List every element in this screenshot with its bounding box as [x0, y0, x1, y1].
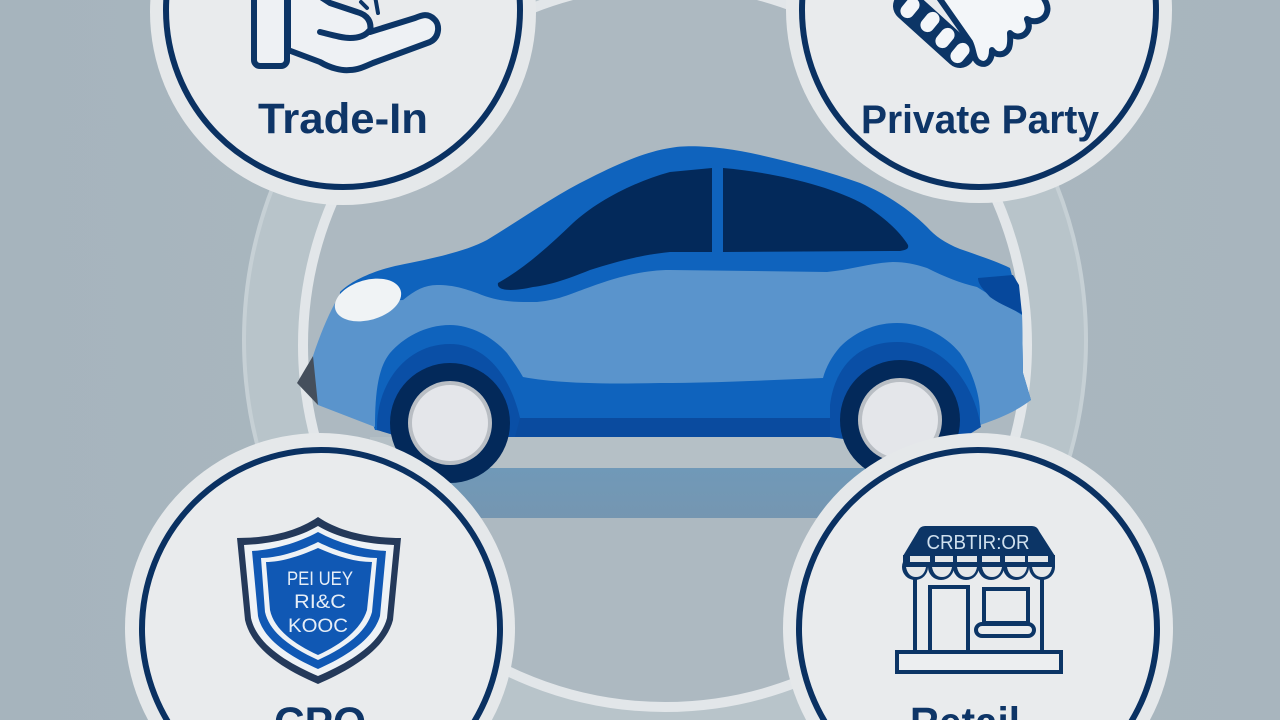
shield inscription: [287, 569, 353, 637]
rear wheel arch: [830, 342, 981, 440]
shield inscription: RI&C: [294, 592, 346, 613]
panel: Retail: [783, 433, 1173, 720]
rear wheel: [840, 360, 960, 480]
car illustration: [297, 146, 1031, 483]
label: Trade-In: Trade-In: [258, 95, 428, 143]
front wheel: [390, 363, 510, 483]
taillight: [978, 275, 1022, 314]
icon: shield badge: [237, 517, 401, 684]
car lower sill: [500, 418, 840, 437]
car bumper: [297, 356, 326, 405]
shield inscription: PEI UEY: [287, 569, 353, 590]
car upper body: [338, 146, 1031, 437]
rear window: [723, 168, 908, 252]
background rings: [244, 0, 1086, 720]
front window: [498, 168, 712, 290]
icon: hand: [254, 0, 438, 70]
awning scallops: [902, 554, 1055, 580]
icon: storefront: [897, 526, 1061, 672]
icon: storefront: CRBTIR:OR: [926, 532, 1030, 554]
headlight: [330, 271, 406, 329]
icon: handshake: [898, 0, 1048, 66]
car light body panel: [313, 262, 1031, 427]
label: Private Party: Private Party: [861, 98, 1100, 142]
panel: Private Party: [786, 0, 1172, 203]
shield inscription: KOOC: [288, 616, 348, 637]
awning sign: [903, 526, 1055, 556]
ground and shadow: [370, 437, 970, 518]
panel: Trade-In: [150, 0, 536, 205]
panel: CPO: [125, 433, 515, 720]
front wheel arch: [377, 344, 520, 437]
